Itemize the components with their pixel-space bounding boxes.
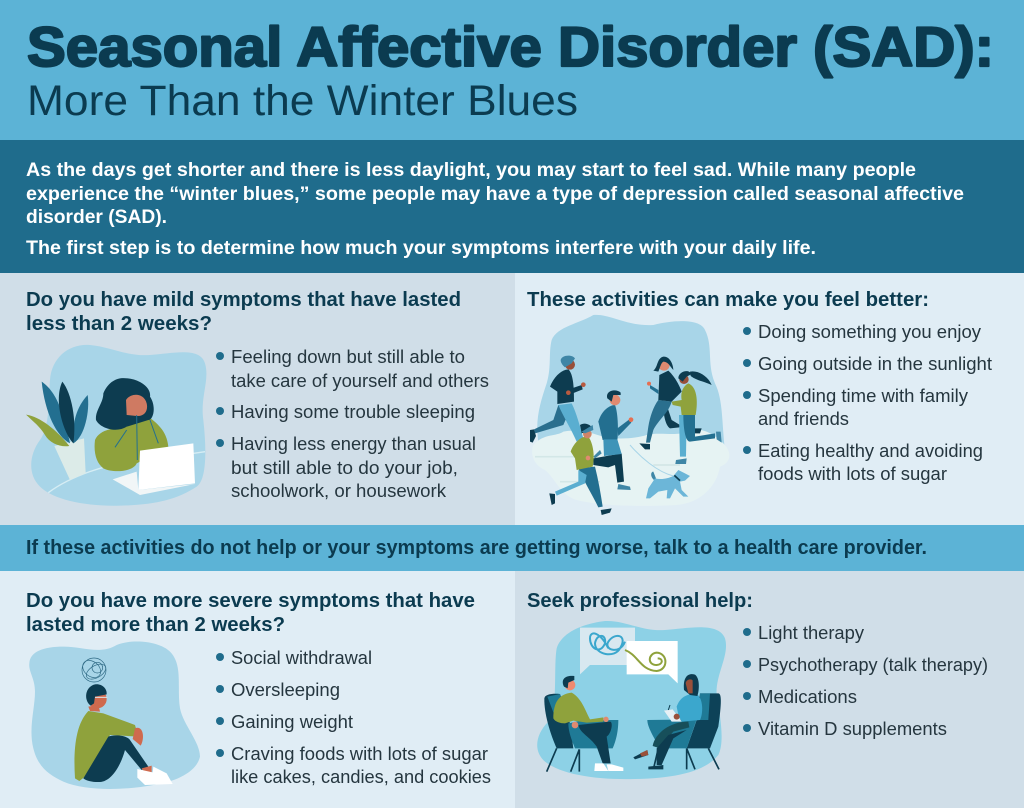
- bullet list: activities: and friends: [758, 409, 849, 429]
- bullet list: professional help: Medications: [758, 687, 857, 707]
- panel: mild symptoms: [0, 273, 515, 525]
- bullet list: activities: Spending time with family: [758, 386, 968, 406]
- bullet list: professional help: Light therapy: [758, 623, 864, 643]
- bullet list: activities: Doing something you enjoy: [758, 322, 981, 342]
- runners right and dog: [630, 357, 722, 498]
- bullet list: mild symptoms: Having less energy than usual: [231, 434, 476, 454]
- heading: helpful activities: These activities can make you feel better:: [527, 289, 929, 311]
- bullet list: mild symptoms: Feeling down but still able to: [231, 347, 465, 367]
- bullet list: activities: Going outside in the sunlight: [758, 354, 992, 374]
- bullet list: severe symptoms: Oversleeping: [231, 680, 340, 700]
- bullet list: severe symptoms: [216, 648, 491, 787]
- bullet list: activities: Eating healthy and avoiding: [758, 441, 983, 461]
- heading: professional help: Seek professional help:: [527, 590, 753, 612]
- illustration: therapy session: [537, 621, 726, 779]
- bullet list: professional help: Vitamin D supplements: [758, 719, 947, 739]
- bullet list: activities: foods with lots of sugar: [758, 464, 947, 484]
- bullet list: severe symptoms: Craving foods with lots of sugar: [231, 744, 488, 764]
- bullet list: mild symptoms: take care of yourself and others: [231, 371, 489, 391]
- bullet list: mild symptoms: but still able to do your job,: [231, 458, 458, 478]
- bullet list: professional help: Psychotherapy (talk therapy): [758, 655, 988, 675]
- panel: intro: disorder (SAD).: [26, 207, 167, 228]
- callout band: [0, 525, 1024, 571]
- heading: mild symptoms: Do you have mild symptoms that have lasted: [26, 289, 461, 311]
- bullet list: mild symptoms: schoolwork, or housework: [231, 481, 447, 501]
- illustration: family jogging with dog: [530, 315, 729, 515]
- heading: severe symptoms: Do you have more severe symptoms that have: [26, 590, 475, 612]
- bullet list: mild symptoms: [216, 347, 489, 501]
- heading: severe symptoms: [26, 590, 475, 636]
- illustration: person sitting with scribble: [29, 642, 200, 789]
- bullet list: mild symptoms: Having some trouble sleeping: [231, 402, 475, 422]
- bullet list: activities: [743, 322, 992, 484]
- subtitle: More Than the Winter Blues: [27, 77, 578, 125]
- bullet list: severe symptoms: Social withdrawal: [231, 648, 372, 668]
- panel: intro: The first step is to determine how much your symptoms interfere with your daily life.: [26, 238, 816, 259]
- bullet list: professional help: [743, 623, 988, 739]
- panel: professional help: [515, 571, 1024, 808]
- panel: helpful activities: [515, 273, 1024, 525]
- illustration: woman at laptop: [26, 345, 206, 506]
- bullet list: severe symptoms: like cakes, candies, and cookies: [231, 767, 491, 787]
- panel: intro: [0, 140, 1024, 273]
- heading: mild symptoms: [26, 289, 461, 335]
- panel: severe symptoms: [0, 571, 515, 808]
- runners left: [530, 356, 633, 515]
- heading: severe symptoms: lasted more than 2 weeks?: [26, 614, 285, 636]
- title: Seasonal Affective Disorder (SAD):: [27, 15, 994, 78]
- bullet list: severe symptoms: Gaining weight: [231, 712, 353, 732]
- heading: mild symptoms: less than 2 weeks?: [26, 313, 212, 335]
- panel: intro: experience the “winter blues,” some people may have a type of depression called seasonal affective: [26, 184, 964, 205]
- panel: intro: As the days get shorter and there is less daylight, you may start to feel sad. While many people: [26, 160, 916, 181]
- callout band: If these activities do not help or your symptoms are getting worse, talk to a health care provider.: [26, 537, 927, 559]
- header band: [0, 0, 1024, 140]
